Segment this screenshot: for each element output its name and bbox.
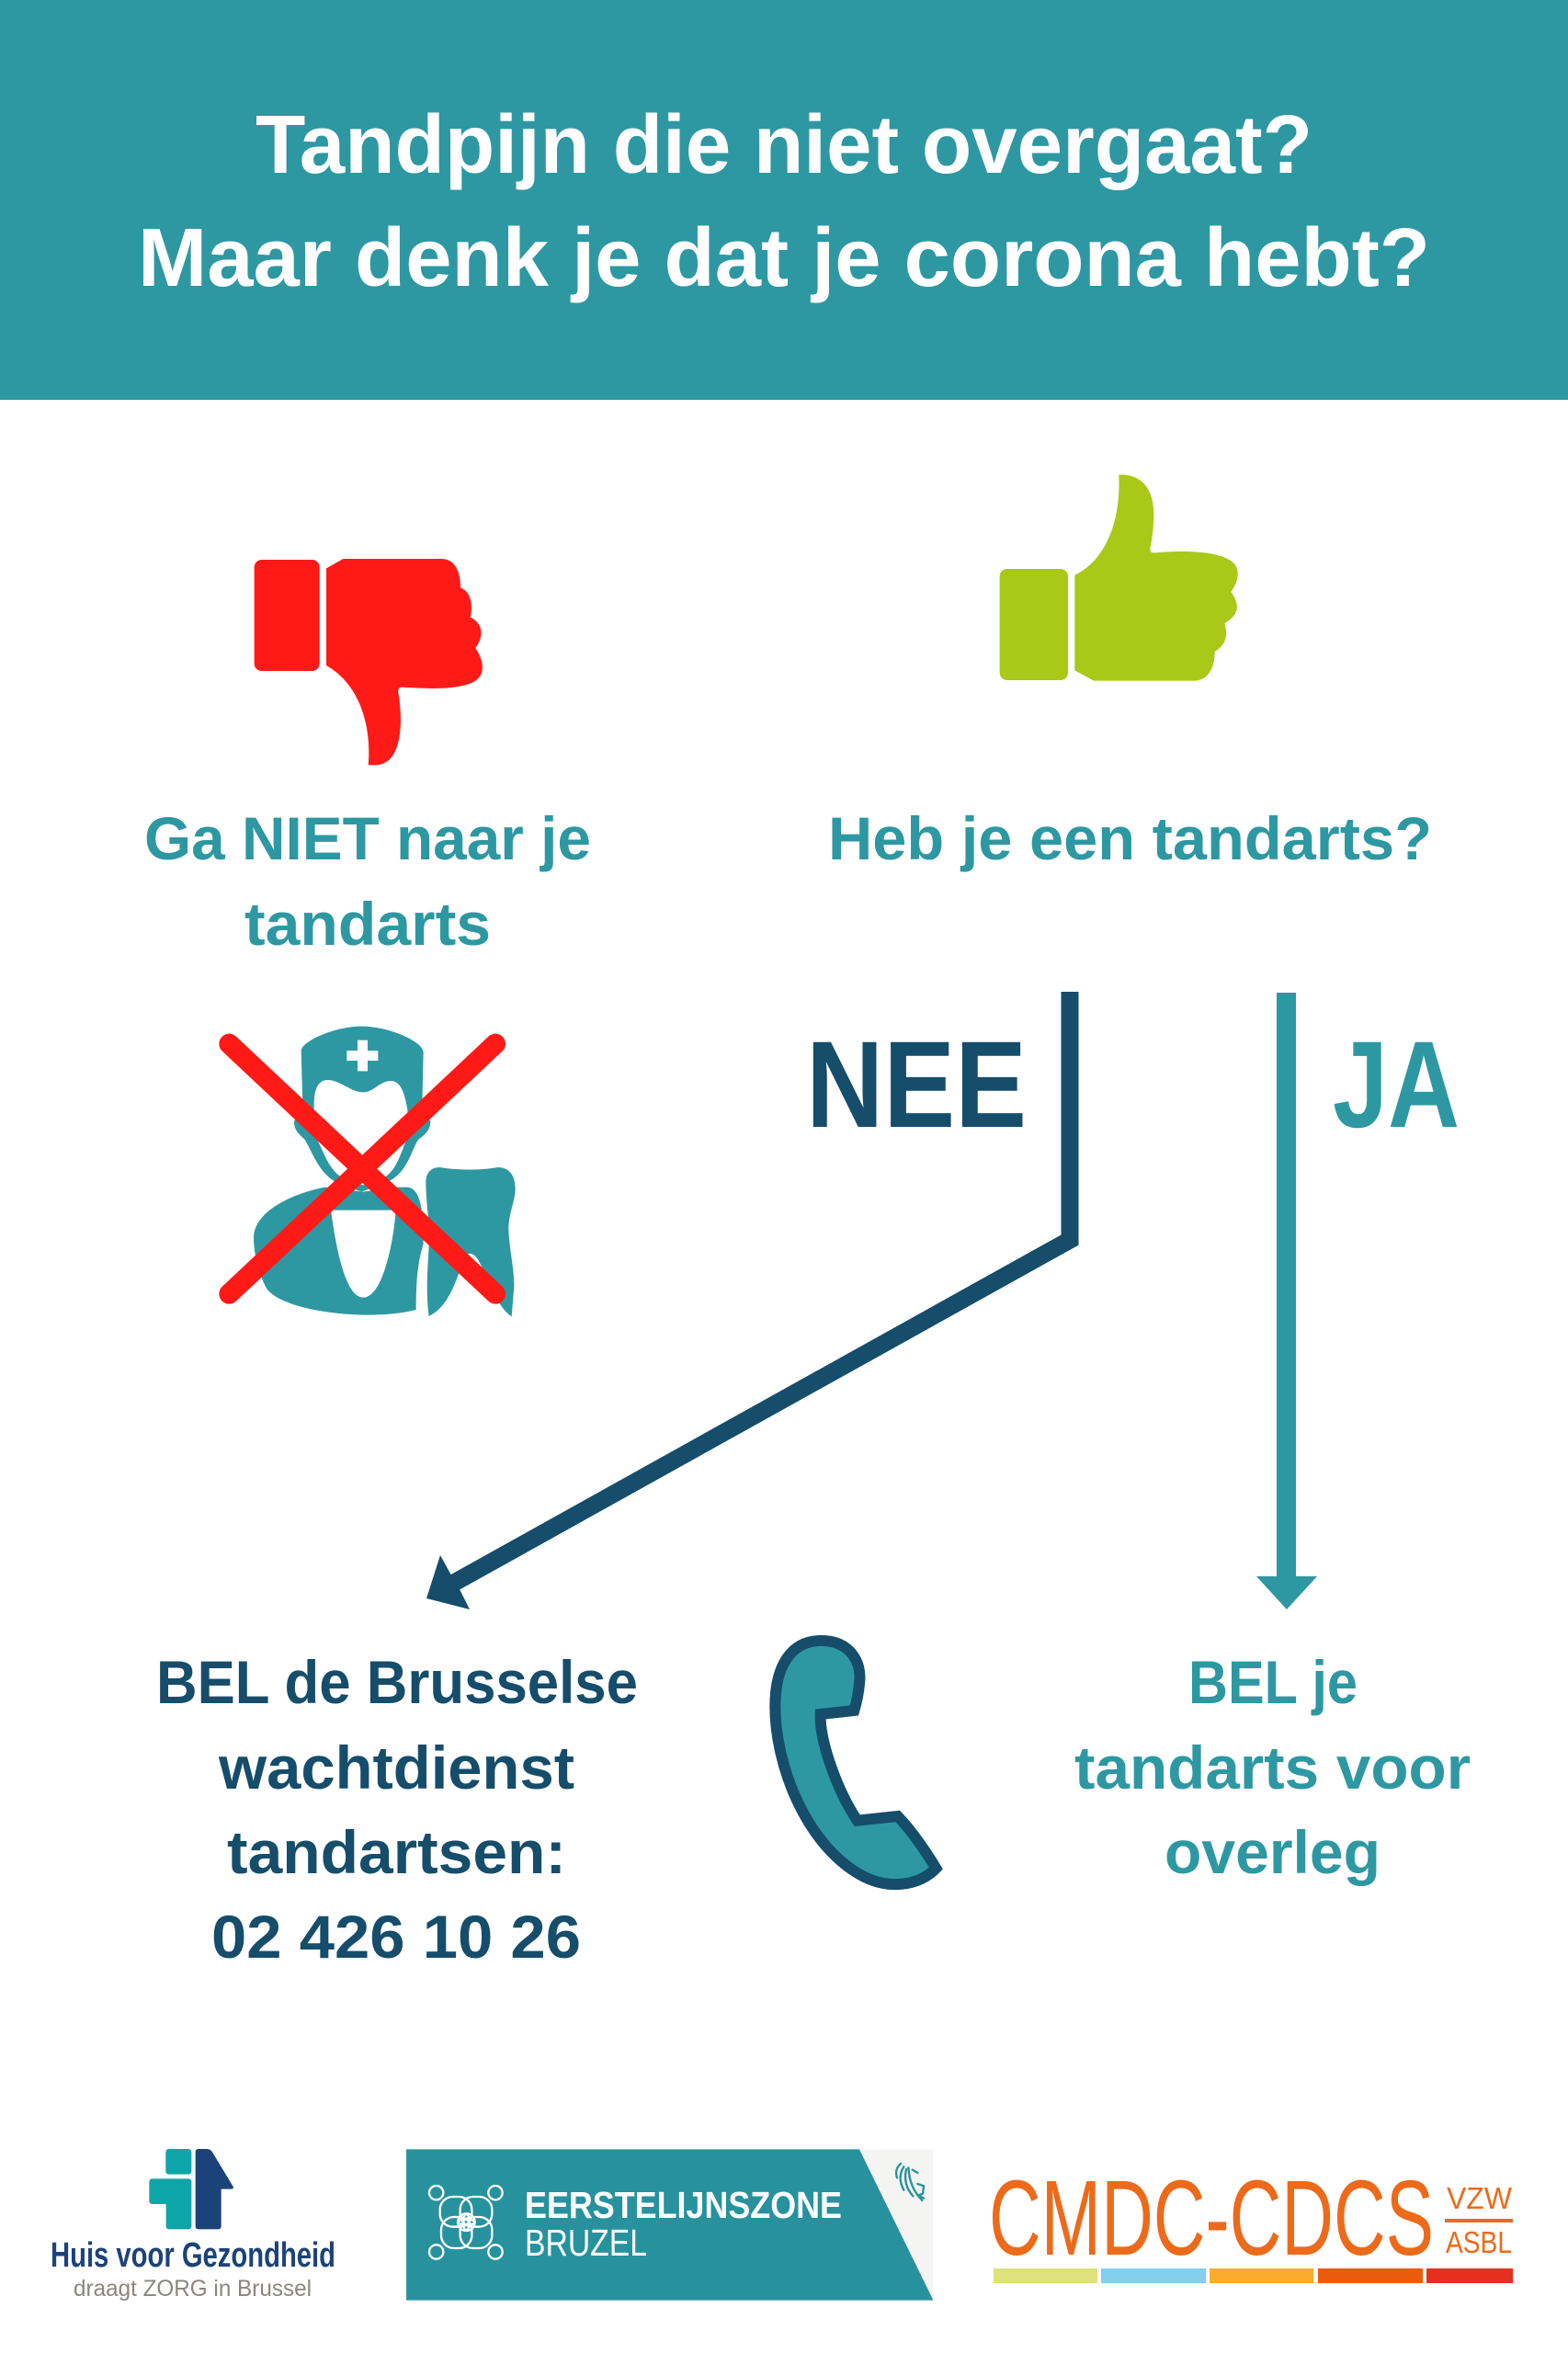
heading: heb je een tandarts: Heb je een tandarts? — [828, 804, 1432, 872]
text: bel je tandarts voor overleg: overleg — [1165, 1818, 1381, 1886]
label: JA: JA — [1333, 1017, 1460, 1154]
logo: Huis voor Gezondheid — [51, 2149, 335, 2302]
logo: Eerstelijnszone Bruzel — [406, 2149, 933, 2301]
heading: ga niet naar je tandarts: tandarts — [244, 890, 491, 958]
icon: thumbs down — [255, 559, 483, 765]
arrow: NEE path to wachtdienst — [426, 992, 1070, 1609]
text: bel de Brusselse wachtdienst — [156, 1648, 638, 1971]
header banner — [0, 0, 1568, 400]
text: bel je tandarts voor overleg — [1074, 1648, 1471, 1886]
network icon — [429, 2186, 503, 2259]
colour bars — [994, 2268, 1513, 2283]
logo: Huis voor Gezondheid: Huis voor Gezondheid — [51, 2236, 335, 2275]
heading: ga niet naar je tandarts — [144, 804, 591, 958]
lion emblem — [896, 2164, 924, 2200]
label: NEE: NEE — [806, 1017, 1027, 1154]
text: bel de Brusselse wachtdienst: 02 426 10 26 — [211, 1903, 581, 1971]
text: bel de Brusselse wachtdienst: wachtdienst — [218, 1733, 574, 1802]
text: bel de Brusselse wachtdienst: BEL de Brusselse — [156, 1648, 638, 1716]
text: bel je tandarts voor overleg: BEL je — [1188, 1648, 1358, 1716]
dentist figure — [254, 1027, 516, 1316]
red cross — [229, 1044, 495, 1294]
icon: phone — [775, 1641, 936, 1884]
heading: ga niet naar je tandarts: Ga NIET naar je — [144, 804, 591, 872]
logo: Eerstelijnszone Bruzel: EERSTELIJNSZONE — [525, 2184, 842, 2226]
title: Tandpijn die niet overgaat? — [256, 99, 1312, 191]
text: bel je tandarts voor overleg: tandarts voor — [1074, 1733, 1471, 1802]
icon: crossed out dentist — [229, 1027, 516, 1316]
cap cross — [347, 1040, 378, 1071]
arrow: JA path to tandarts — [1256, 993, 1317, 1609]
logo mark — [149, 2149, 233, 2229]
logo: CMDC-CDCS: ASBL — [1446, 2225, 1512, 2259]
logo: CMDC-CDCS: VZW — [1447, 2181, 1513, 2215]
icon: thumbs up — [1000, 475, 1238, 681]
banner — [406, 2149, 933, 2301]
logo: Huis voor Gezondheid: draagt ZORG in Brussel — [74, 2276, 312, 2302]
text: bel de Brusselse wachtdienst: tandartsen: — [227, 1818, 566, 1886]
title: Maar denk je dat je corona hebt? — [138, 212, 1430, 304]
title — [138, 99, 1430, 304]
logo: Eerstelijnszone Bruzel: BRUZEL — [525, 2222, 647, 2264]
